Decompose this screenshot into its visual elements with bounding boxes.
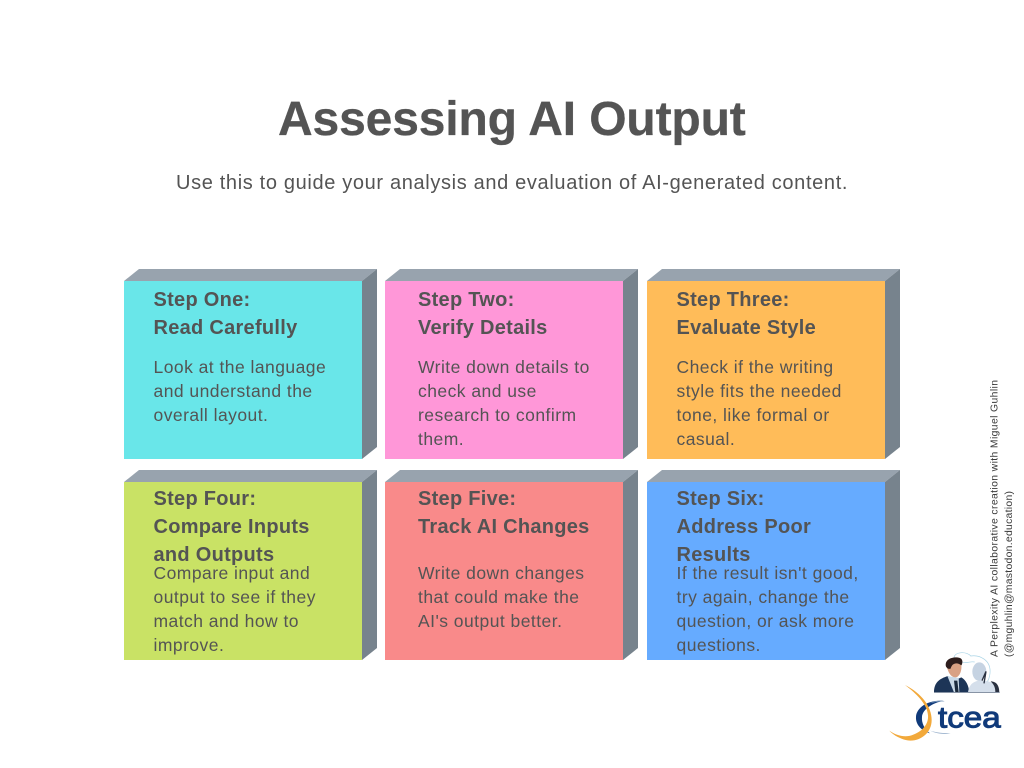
heading: step two: Step Two: bbox=[418, 289, 515, 311]
logo wordmark: tcea bbox=[938, 701, 1001, 734]
text: step one: and understand the bbox=[154, 381, 313, 401]
heading: step two bbox=[418, 289, 548, 339]
logo mark: blue ring bbox=[916, 701, 951, 734]
heading: step six: Results bbox=[676, 544, 751, 566]
logo mark: orange swoosh bbox=[889, 685, 932, 741]
text: step two: Write down details to bbox=[418, 357, 590, 377]
heading: step five: Step Five: bbox=[418, 488, 516, 510]
text: step four: output to see if they bbox=[154, 587, 316, 607]
heading: step four bbox=[154, 488, 310, 566]
text: step two bbox=[418, 357, 590, 449]
text: step six bbox=[676, 563, 859, 655]
text: step five: AI's output better. bbox=[418, 611, 562, 631]
subtitle: Use this to guide your analysis and evaluation of AI-generated content. bbox=[176, 172, 848, 194]
text: step five: Write down changes bbox=[418, 563, 585, 583]
text: step six: try again, change the bbox=[676, 587, 850, 607]
heading: step one: Step One: bbox=[154, 289, 250, 311]
panel: step three bbox=[647, 269, 900, 459]
text: step four: improve. bbox=[154, 635, 224, 655]
panel: step six bbox=[647, 470, 900, 660]
text: step three: Check if the writing bbox=[676, 357, 834, 377]
credit text: A Perplexity AI collaborative creation with Miguel Guhlin bbox=[990, 380, 1000, 657]
text: step three: casual. bbox=[676, 429, 735, 449]
text: step three bbox=[676, 357, 842, 449]
text: step one: overall layout. bbox=[154, 405, 268, 425]
credit text bbox=[990, 380, 1015, 657]
heading: step six bbox=[676, 488, 811, 566]
panel: step two bbox=[385, 269, 638, 459]
text: step six: questions. bbox=[676, 635, 761, 655]
icon: person and robot bbox=[934, 652, 1000, 693]
panel: step four bbox=[124, 470, 377, 660]
text: step three: style fits the needed bbox=[676, 381, 842, 401]
text: step four bbox=[154, 563, 316, 655]
heading: step four: Step Four: bbox=[154, 488, 256, 510]
text: step one: Look at the language bbox=[154, 357, 326, 377]
heading: step four: and Outputs bbox=[154, 544, 274, 566]
heading: step three: Evaluate Style bbox=[676, 317, 816, 339]
heading: step one: Read Carefully bbox=[154, 317, 297, 339]
panel: step five bbox=[385, 470, 638, 660]
credit text: (@mguhlin@mastodon.education) bbox=[1004, 491, 1015, 657]
heading: step four: Compare Inputs bbox=[154, 516, 310, 538]
heading: step two: Verify Details bbox=[418, 317, 548, 339]
text: step two: research to confirm bbox=[418, 405, 577, 425]
heading: step three bbox=[676, 289, 816, 339]
heading: step one bbox=[154, 289, 298, 339]
text: step four: Compare input and bbox=[154, 563, 310, 583]
text: step two: them. bbox=[418, 429, 464, 449]
panel: step one bbox=[124, 269, 377, 459]
text: step one bbox=[154, 357, 326, 425]
text: step six: question, or ask more bbox=[676, 611, 854, 631]
heading: step six: Step Six: bbox=[676, 488, 765, 510]
text: step four: match and how to bbox=[154, 611, 299, 631]
text: step five: that could make the bbox=[418, 587, 579, 607]
text: step five bbox=[418, 563, 585, 631]
heading: step five bbox=[418, 488, 590, 538]
text: step six: If the result isn't good, bbox=[676, 563, 859, 583]
heading: step five: Track AI Changes bbox=[418, 516, 590, 538]
text: step three: tone, like formal or bbox=[676, 405, 830, 425]
title: Assessing AI Output bbox=[278, 93, 746, 146]
heading: step three: Step Three: bbox=[676, 289, 790, 311]
text: step two: check and use bbox=[418, 381, 537, 401]
heading: step six: Address Poor bbox=[676, 516, 811, 538]
logo: tcea bbox=[890, 685, 1002, 741]
